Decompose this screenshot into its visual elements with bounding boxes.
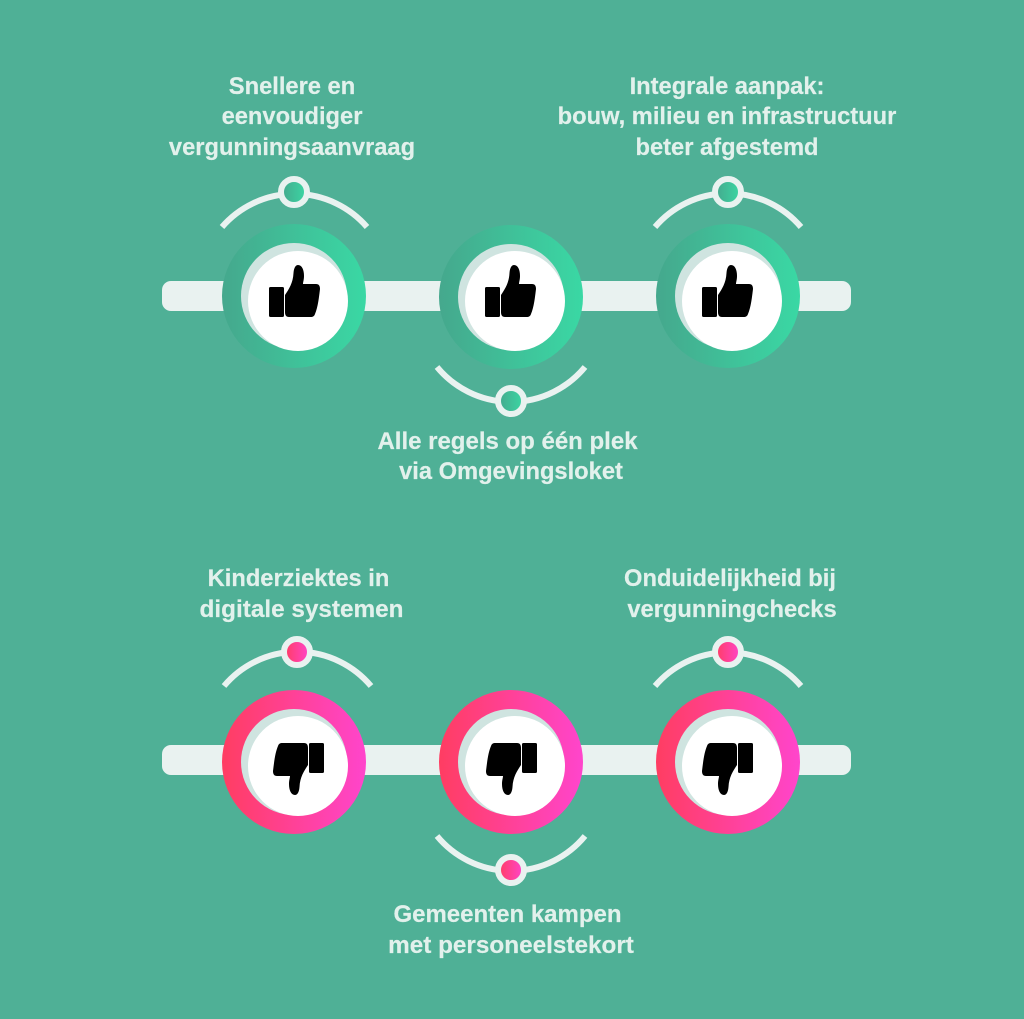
heading: integrale aanpak: beter afgestemd	[636, 135, 818, 161]
connector arc: middle negative	[437, 836, 585, 883]
connector arc: left negative	[224, 639, 371, 686]
heading: integrale aanpak: bouw, milieu en infrastructuur	[558, 104, 896, 130]
heading: snellere vergunningsaanvraag: eenvoudiger	[222, 104, 362, 130]
timeline bar: positive	[162, 281, 851, 311]
heading: kinderziektes: digitale systemen	[200, 596, 403, 623]
icon: thumbs up	[269, 265, 320, 317]
heading: integrale aanpak	[558, 74, 896, 161]
icon: thumbs down	[273, 743, 324, 795]
heading: alle regels	[377, 428, 638, 485]
heading: snellere vergunningsaanvraag: Snellere en	[229, 74, 355, 100]
heading: onduidelijkheid	[624, 566, 837, 623]
heading: alle regels: Alle regels op één plek	[377, 428, 638, 455]
heading: gemeenten: Gemeenten kampen	[393, 901, 622, 928]
badge: thumbs up right	[656, 224, 800, 368]
icon: thumbs down	[486, 743, 537, 795]
badge: thumbs down right	[656, 690, 800, 834]
badge: thumbs up middle	[439, 225, 583, 369]
heading: snellere vergunningsaanvraag	[169, 74, 415, 161]
icon: thumbs up	[702, 265, 753, 317]
icon: thumbs up	[485, 265, 536, 317]
heading: gemeenten: met personeelstekort	[388, 932, 634, 959]
connector arc: middle positive	[437, 367, 585, 414]
connector arc: right negative	[655, 639, 801, 686]
timeline bar: negative	[162, 745, 851, 775]
connector arc: left positive	[222, 179, 367, 227]
badge: thumbs up left	[222, 224, 366, 368]
heading: snellere vergunningsaanvraag: vergunningsaanvraag	[169, 135, 415, 161]
heading: gemeenten	[388, 901, 634, 959]
panel: negative points	[162, 566, 851, 959]
heading: kinderziektes	[200, 566, 403, 623]
panel: positive points	[162, 74, 896, 485]
heading: onduidelijkheid: Onduidelijkheid bij	[624, 566, 836, 592]
heading: alle regels: via Omgevingsloket	[399, 459, 623, 485]
heading: onduidelijkheid: vergunningchecks	[627, 597, 837, 623]
icon: thumbs down	[702, 743, 753, 795]
badge: thumbs down middle	[439, 690, 583, 834]
badge: thumbs down left	[222, 690, 366, 834]
heading: integrale aanpak: Integrale aanpak:	[630, 74, 824, 100]
heading: kinderziektes: Kinderziektes in	[208, 566, 389, 592]
connector arc: right positive	[655, 179, 801, 227]
